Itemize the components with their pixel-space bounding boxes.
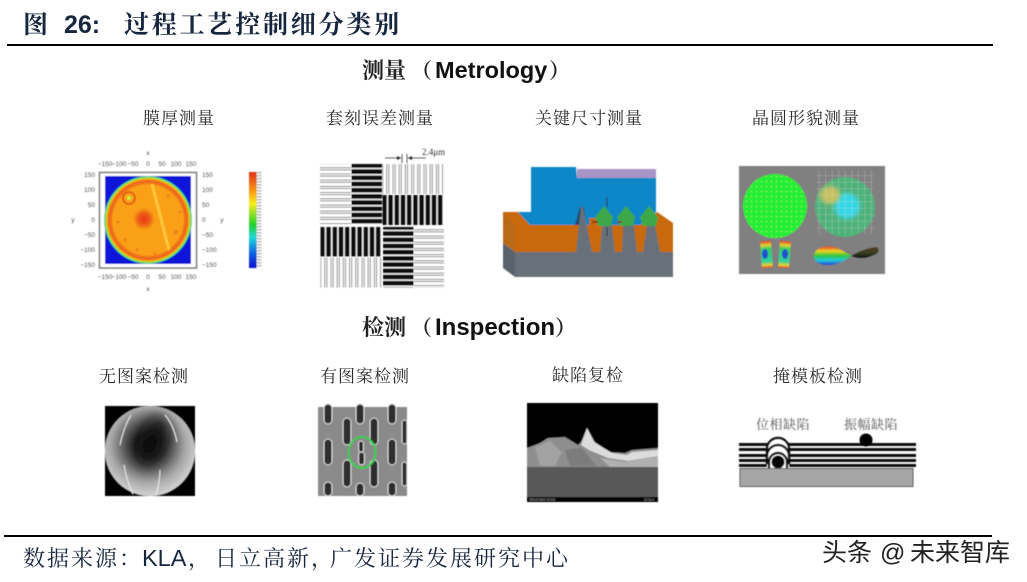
label: overlay: 套刻误差测量 [326,109,434,128]
label: patterned inspection: 有图案检测 [320,367,410,386]
chart: film thickness wafer map: 100 [171,274,182,281]
label: unpatterned inspection: 无图案检测 [99,367,189,386]
chart: film thickness wafer map: 100 [84,187,95,194]
diagram: critical dimension cross-section [503,167,673,277]
watermark: 头条 [822,539,872,567]
watermark: @ [880,539,905,567]
chart: film thickness wafer map: 150 [186,161,197,168]
chart: film thickness wafer map: 50 [158,274,166,281]
legend: colour scale [249,172,260,268]
heading: metrology: Metrology [435,57,547,83]
diagram: mask blank defects [739,417,916,486]
heading: inspection [362,314,576,341]
chart: overlay pattern: 2.4μm [422,147,445,157]
source note [23,545,570,572]
chart: film thickness wafer map: y [220,217,224,224]
chart: film thickness wafer map: −150 [80,262,95,269]
source note: ， [188,546,210,572]
chart: film thickness wafer map: −50 [127,161,139,168]
chart: film thickness wafer map: −100 [112,274,127,281]
heading: metrology: ） [549,60,570,83]
chart: film thickness wafer map: −50 [202,232,213,239]
label: film thickness: 膜厚测量 [143,109,215,128]
source note: 数据来源： [23,546,143,571]
chart: film thickness wafer map: y [71,217,75,224]
label: wafer shape: 晶圆形貌测量 [752,109,860,128]
heading: inspection: 检测 [362,315,406,340]
chart: film thickness wafer map: −50 [127,274,139,281]
figure title: 图 [23,11,48,39]
heading: metrology: 测量 [362,58,406,83]
label: defect review: 缺陷复检 [552,366,624,385]
heading: inspection: （ [411,317,432,340]
chart: film thickness wafer map: 0 [146,161,150,168]
image: wafer shape maps [739,166,885,274]
chart: film thickness wafer map: 100 [202,187,213,194]
diagram: mask blank defects: 位相缺陷 [756,417,810,432]
chart: film thickness wafer map [71,150,224,293]
chart: film thickness wafer map: x [146,150,150,157]
heading: inspection: Inspection [435,314,555,341]
figure title: 26: [64,11,100,39]
heading: metrology [362,57,570,83]
chart: film thickness wafer map: 0 [91,217,95,224]
image: unpatterned wafer scan [105,406,195,496]
title rule [7,44,993,46]
chart: film thickness wafer map: 150 [84,172,95,179]
heading: metrology: （ [411,60,432,83]
footer rule [4,535,992,537]
heading: inspection: ） [555,317,576,340]
image: defect review SEM [527,403,658,502]
image: patterned SEM with defect [318,404,407,496]
chart: film thickness wafer map: −150 [98,161,113,168]
chart: film thickness wafer map: −100 [202,247,217,254]
watermark: 未来智库 [910,539,1010,567]
chart: film thickness wafer map: x [146,286,150,293]
diagram: mask blank defects: 振幅缺陷 [844,417,898,432]
source note: KLA [142,545,187,571]
image: defect review SEM: 10.0μm [644,498,655,502]
figure title: 过程工艺控制细分类别 [124,11,402,39]
chart: overlay pattern [320,147,445,288]
chart: film thickness wafer map: 50 [202,202,210,209]
chart: film thickness wafer map: 0 [146,274,150,281]
chart: film thickness wafer map: 150 [202,172,213,179]
source note: 日立高新， [215,546,335,572]
label: mask inspection: 掩模板检测 [773,367,863,386]
chart: film thickness wafer map: −100 [80,247,95,254]
chart: film thickness wafer map: 50 [158,161,166,168]
chart: film thickness wafer map: 150 [186,274,197,281]
chart: film thickness wafer map: −50 [84,232,95,239]
chart: film thickness wafer map: 50 [88,202,95,209]
chart: film thickness wafer map: 100 [171,161,182,168]
chart: film thickness wafer map: −150 [98,274,113,281]
chart: film thickness wafer map: −150 [202,262,217,269]
watermark [822,539,1010,567]
chart: film thickness wafer map: 0 [202,217,206,224]
chart: film thickness wafer map: −100 [112,161,127,168]
label: critical dimension: 关键尺寸测量 [535,109,643,128]
source note: 广发证券发展研究中心 [330,546,570,571]
image: defect review SEM: SEM 5.00kV x5.00k [529,498,556,502]
